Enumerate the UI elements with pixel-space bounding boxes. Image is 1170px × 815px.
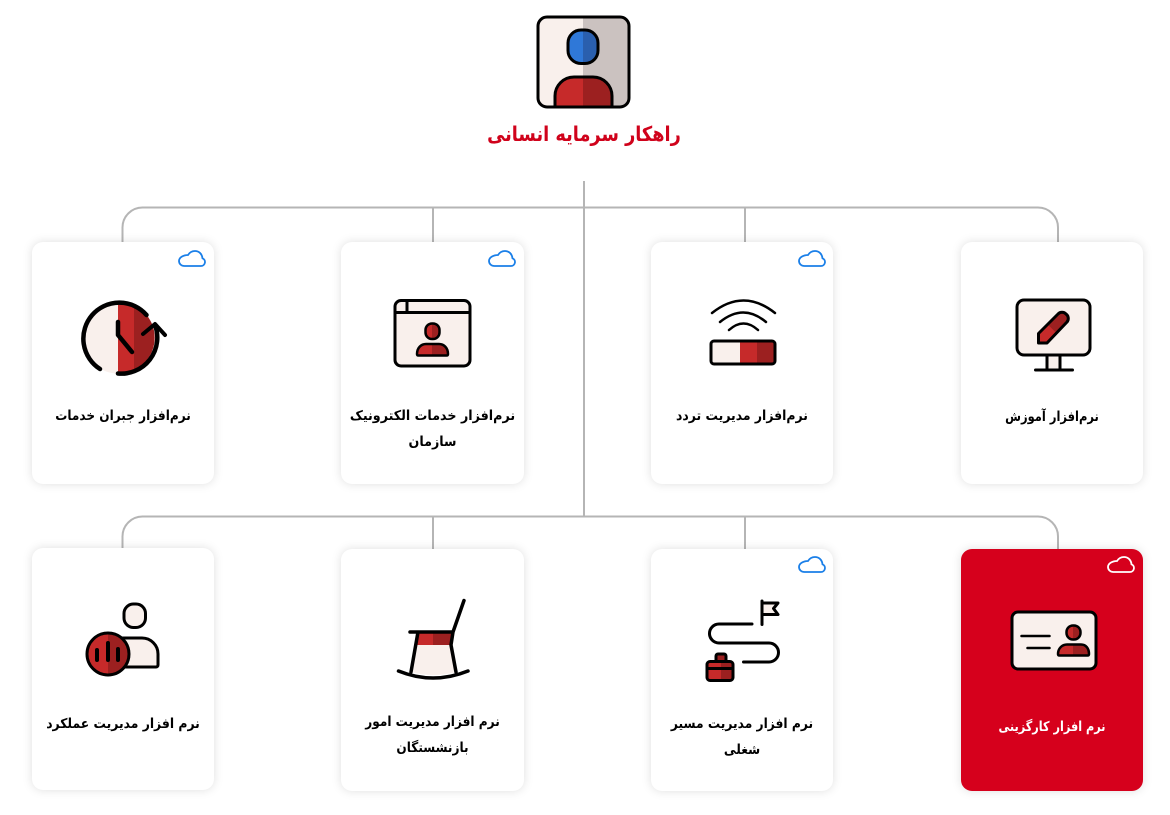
icon: person with chart bbox=[86, 602, 160, 676]
icon: clock with arrow bbox=[81, 300, 168, 376]
label: نرم‌افزار آموزش bbox=[1005, 409, 1099, 425]
panel: attendance software bbox=[651, 242, 833, 484]
icon: path with flag and briefcase bbox=[706, 600, 780, 682]
label: نرم‌افزار جبران خدمات bbox=[55, 408, 191, 424]
icon: ID card bbox=[1010, 610, 1098, 670]
icon: cloud bbox=[798, 556, 826, 573]
label: سازمان bbox=[408, 434, 456, 450]
label: شغلی bbox=[724, 742, 760, 758]
icon: cloud bbox=[1107, 556, 1135, 573]
icon: rocking chair bbox=[396, 598, 470, 680]
panel: training software bbox=[961, 242, 1143, 484]
label: نرم افزار مدیریت مسیر bbox=[671, 716, 813, 732]
panel: organization e-services software bbox=[341, 242, 524, 484]
label bbox=[364, 714, 500, 756]
label: نرم‌افزار خدمات الکترونیک bbox=[350, 408, 515, 424]
panel: career path software bbox=[651, 549, 833, 791]
panel: retirement software bbox=[341, 549, 524, 791]
label bbox=[350, 408, 515, 450]
label: بازنشستگان bbox=[396, 740, 469, 756]
icon: browser with person bbox=[394, 299, 472, 368]
label bbox=[670, 716, 813, 758]
label: نرم‌افزار مدیریت تردد bbox=[676, 408, 808, 424]
panel: performance software bbox=[32, 548, 214, 790]
title: راهکار سرمایه انسانی bbox=[487, 122, 681, 146]
icon: cloud bbox=[178, 250, 206, 267]
icon: cloud bbox=[798, 250, 826, 267]
icon: cloud bbox=[488, 250, 516, 267]
icon: wireless reader bbox=[710, 299, 776, 366]
panel: recruitment software bbox=[961, 549, 1143, 791]
label: نرم افزار مدیریت عملکرد bbox=[46, 716, 200, 732]
label: نرم افزار کارگزینی bbox=[999, 719, 1105, 735]
label: نرم افزار مدیریت امور bbox=[365, 714, 500, 730]
panel: compensation software bbox=[32, 242, 214, 484]
icon: monitor with pencil bbox=[1016, 298, 1092, 372]
